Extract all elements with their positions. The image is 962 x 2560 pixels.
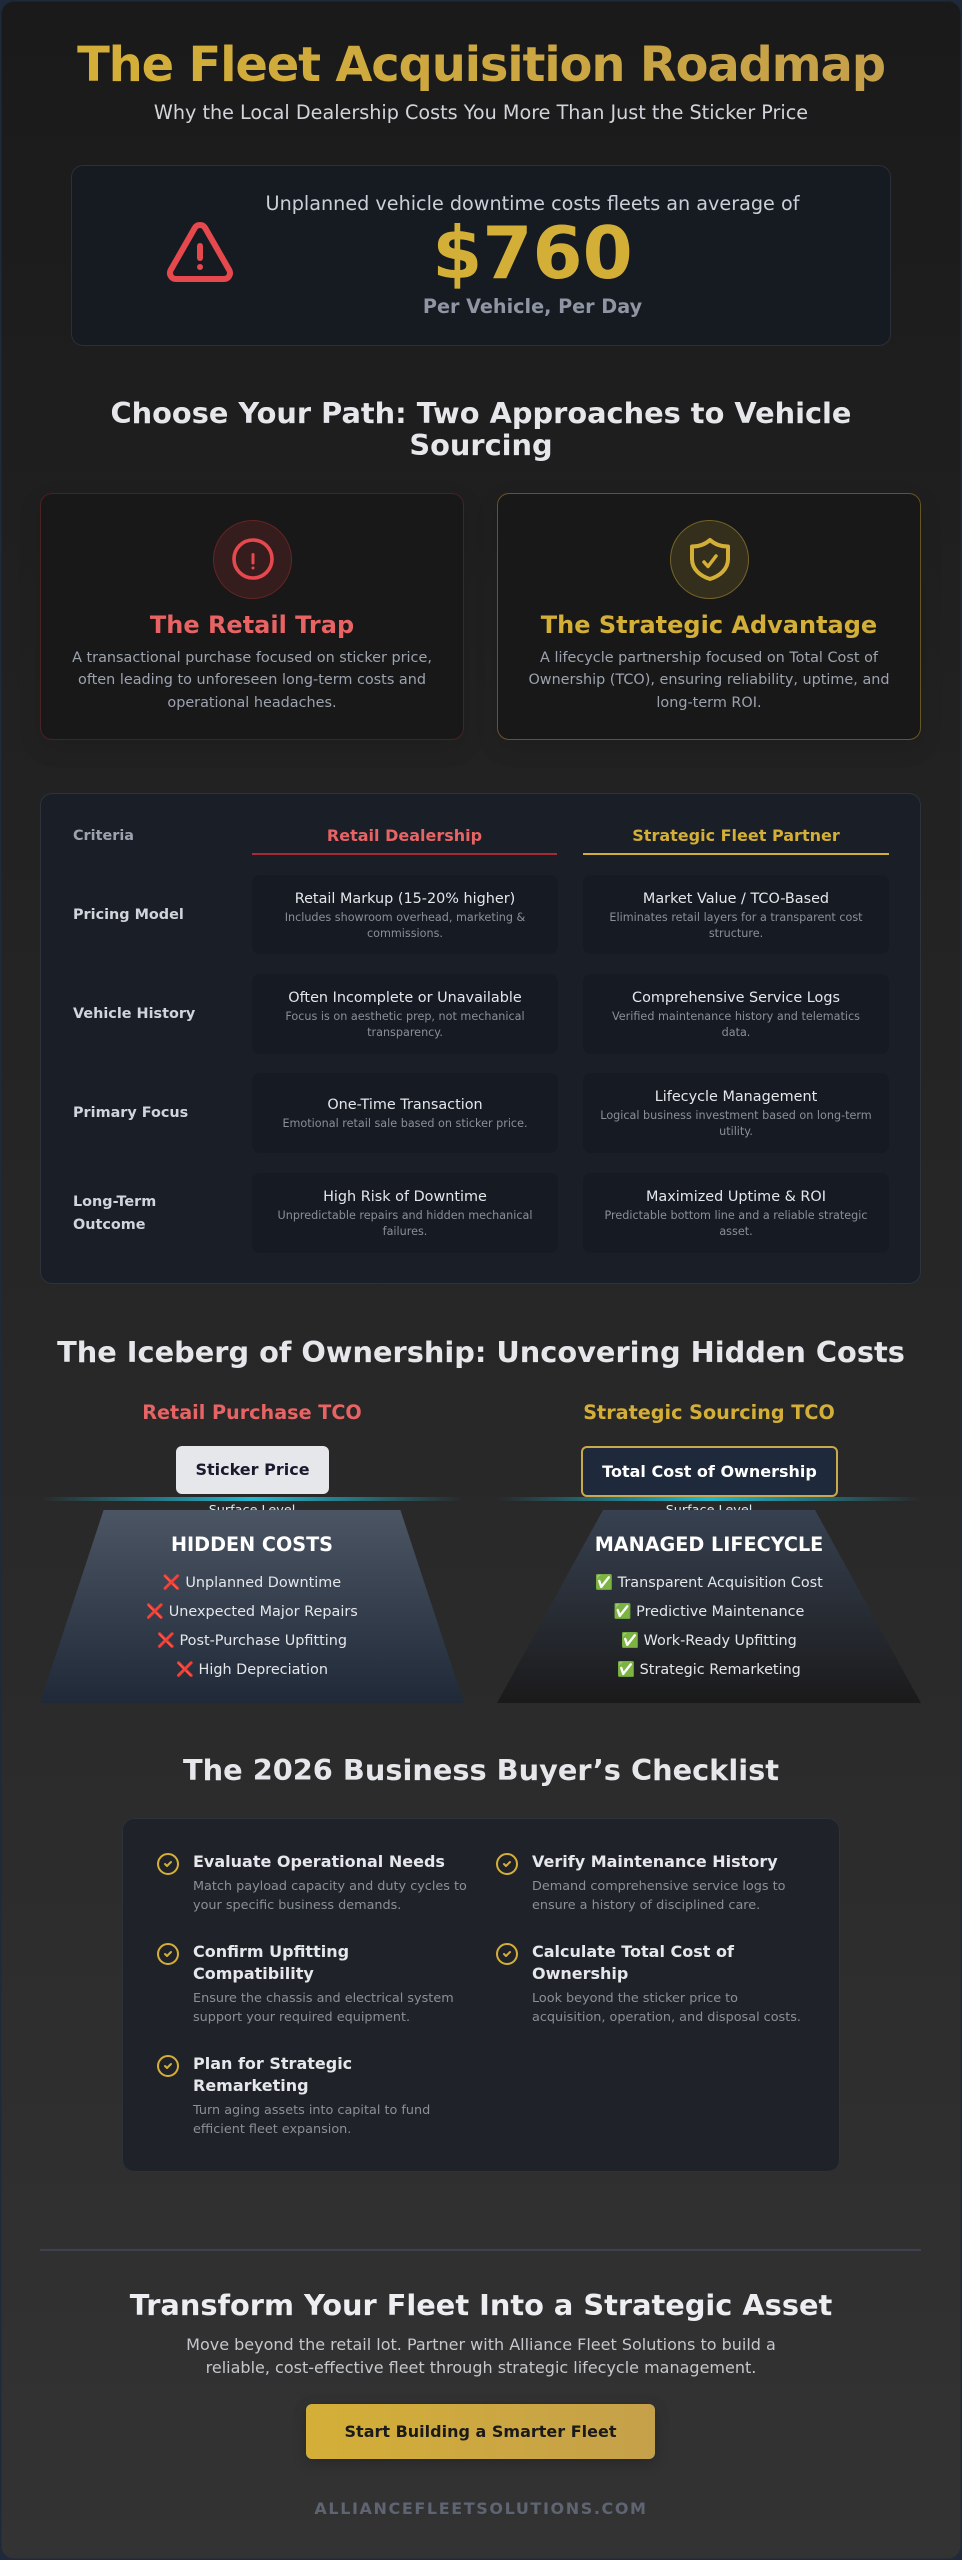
item description: Look beyond the sticker price to (532, 1991, 738, 2006)
cell: retail history (252, 974, 558, 1054)
item description (193, 1879, 467, 1913)
cell: strategic focus (583, 1073, 889, 1153)
cell: strategic outcome (583, 1173, 889, 1253)
submerged heading: HIDDEN COSTS (171, 1533, 333, 1556)
lifecycle items: ✅ Work-Ready Upfitting (621, 1633, 797, 1649)
card description: Ownership (TCO), ensuring reliability, uptime, and (528, 672, 890, 688)
lifecycle items (596, 1574, 822, 1677)
icon: check circle (496, 1853, 518, 1875)
hidden cost items: ❌ Post-Purchase Upfitting (157, 1633, 347, 1649)
above-water tip: total cost of ownership: Total Cost of Ownership (602, 1462, 817, 1481)
row label: long-term outcome (73, 1194, 156, 1233)
heading: choose your path: Sourcing (409, 428, 553, 462)
icon: shield check (670, 520, 749, 599)
column header: retail dealership (252, 825, 557, 855)
hidden cost items: ❌ High Depreciation (176, 1662, 328, 1678)
cell: retail history: Focus is on aesthetic prep, not mechanical transparency. (285, 1010, 525, 1039)
item title: Remarketing (193, 2076, 309, 2095)
button: start building: Start Building a Smarter Fleet (345, 2422, 616, 2441)
column label: criteria: Criteria (73, 828, 134, 844)
heading: call to action: Transform Your Fleet Into a Strategic Asset (130, 2288, 832, 2322)
icon: check circle (157, 1853, 179, 1875)
card description: operational headaches. (167, 695, 337, 711)
cell: retail pricing: Retail Markup (15-20% higher) (295, 890, 515, 906)
panel: downtime statistic alert (71, 165, 891, 346)
surface label: Surface Level (209, 1503, 295, 1518)
heading: business buyer checklist: The 2026 Business Buyer’s Checklist (183, 1753, 779, 1787)
column header: strategic fleet partner: Strategic Fleet Partner (632, 826, 840, 845)
row label: vehicle history: Vehicle History (73, 1006, 195, 1022)
hidden cost items: ❌ Unexpected Major Repairs (146, 1604, 358, 1620)
stat lead-in text: Unplanned vehicle downtime costs fleets an average of (266, 192, 799, 215)
stat value: $760 (432, 211, 633, 295)
footer url: ALLIANCEFLEETSOLUTIONS.COM (314, 2499, 648, 2518)
cell: strategic pricing (583, 875, 889, 954)
item description: Match payload capacity and duty cycles to (193, 1879, 467, 1894)
cell: strategic history: Comprehensive Service Logs (632, 990, 840, 1006)
cell: strategic focus: Lifecycle Management (655, 1089, 817, 1105)
item description: support your required equipment. (193, 2010, 410, 2025)
call to action text (186, 2335, 776, 2377)
above-water tip: sticker price (176, 1446, 329, 1494)
icon: check circle (157, 1943, 179, 1965)
lifecycle items: ✅ Strategic Remarketing (617, 1662, 801, 1678)
heading: choose your path (111, 396, 851, 462)
item description (193, 1991, 454, 2025)
item title (193, 2054, 352, 2095)
cell: strategic pricing: Eliminates retail layers for a transparent cost structure. (609, 910, 863, 940)
card description: A transactional purchase focused on sticker price, (72, 650, 432, 666)
title: The Fleet Acquisition Roadmap (77, 37, 885, 93)
column header: strategic fleet partner (583, 825, 889, 855)
cell: strategic focus: Logical business investment based on long-term utility. (600, 1109, 872, 1138)
row label: primary focus: Primary Focus (73, 1105, 188, 1121)
item title: Compatibility (193, 1964, 314, 1983)
row label: long-term outcome: Outcome (73, 1217, 146, 1233)
item title (193, 1942, 349, 1983)
icon: warning triangle (166, 222, 234, 282)
stat unit: Per Vehicle, Per Day (423, 295, 642, 318)
hidden cost items (147, 1574, 358, 1677)
panel: checklist (122, 1818, 840, 2172)
panel: comparison table (40, 793, 921, 1284)
button: start building (306, 2404, 655, 2459)
cell: retail outcome (252, 1173, 558, 1253)
cell: strategic outcome: Predictable bottom line and a reliable strategic asset. (604, 1209, 868, 1238)
checklist item: evaluate operational needs (157, 1852, 467, 1913)
card description: often leading to unforeseen long-term costs and (78, 672, 426, 688)
surface label: Surface Level (666, 1503, 752, 1518)
card heading: The Strategic Advantage (541, 611, 877, 639)
icon: check circle (157, 2055, 179, 2077)
cell: retail focus: Emotional retail sale based on sticker price. (282, 1117, 528, 1130)
cell: retail history: Often Incomplete or Unavailable (288, 990, 522, 1006)
heading: iceberg of ownership: The Iceberg of Ownership: Uncovering Hidden Costs (57, 1335, 905, 1369)
item title: Verify Maintenance History (532, 1852, 778, 1871)
hidden cost items: ❌ Unplanned Downtime (163, 1575, 341, 1591)
item title: Calculate Total Cost of (532, 1942, 734, 1961)
iceberg heading: Strategic Sourcing TCO (583, 1401, 835, 1424)
card heading: The Retail Trap (150, 611, 354, 639)
cell: retail outcome: High Risk of Downtime (323, 1189, 487, 1205)
card description (528, 650, 890, 711)
item description: Turn aging assets into capital to fund (193, 2103, 430, 2118)
iceberg heading: Retail Purchase TCO (142, 1401, 362, 1424)
panel: strategic iceberg (497, 1401, 921, 1703)
item title: Ownership (532, 1964, 628, 1983)
lifecycle items: ✅ Transparent Acquisition Cost (595, 1575, 823, 1591)
panel: the retail trap (40, 493, 464, 740)
cell: retail focus: One-Time Transaction (327, 1097, 483, 1113)
checklist item: verify maintenance history (496, 1852, 785, 1913)
checklist item: calculate total cost of ownership (496, 1942, 801, 2025)
lifecycle items: ✅ Predictive Maintenance (614, 1604, 804, 1620)
submerged iceberg: managed lifecycle (497, 1510, 921, 1703)
item description (192, 2103, 430, 2137)
cell: retail focus (252, 1073, 558, 1153)
card description (72, 650, 432, 711)
call to action text: Move beyond the retail lot. Partner with Alliance Fleet Solutions to build a (186, 2335, 776, 2354)
item description: ensure a history of disciplined care. (532, 1898, 760, 1913)
water line (40, 1497, 464, 1501)
panel: the strategic advantage (497, 493, 921, 740)
item description: your specific business demands. (193, 1898, 401, 1913)
item description: acquisition, operation, and disposal costs. (532, 2010, 801, 2025)
item description (532, 1879, 785, 1913)
cell: strategic pricing: Market Value / TCO-Based (643, 890, 829, 906)
water line (497, 1497, 921, 1501)
item description: efficient fleet expansion. (193, 2122, 351, 2137)
item title: Plan for Strategic (193, 2054, 352, 2073)
cell: retail outcome: Unpredictable repairs and hidden mechanical failures. (278, 1209, 532, 1238)
row label: long-term outcome: Long-Term (73, 1194, 156, 1210)
item title: Confirm Upfitting (193, 1942, 349, 1961)
item title (532, 1942, 734, 1983)
item description (532, 1991, 801, 2025)
checklist item: confirm upfitting compatibility (157, 1942, 454, 2025)
panel: retail iceberg (40, 1401, 464, 1703)
checklist item: plan for strategic remarketing (157, 2054, 430, 2137)
item description: Ensure the chassis and electrical system (193, 1991, 454, 2006)
cell: retail pricing: Includes showroom overhead, marketing & commissions. (285, 910, 525, 940)
heading: choose your path: Choose Your Path: Two Approaches to Vehicle (111, 396, 851, 430)
cell: strategic history (583, 974, 889, 1054)
call to action text: reliable, cost-effective fleet through strategic lifecycle management. (206, 2358, 756, 2377)
icon: check circle (496, 1943, 518, 1965)
submerged iceberg: hidden costs (40, 1510, 464, 1703)
icon: alert circle (213, 520, 292, 599)
item description: Demand comprehensive service logs to (532, 1879, 785, 1894)
submerged heading: MANAGED LIFECYCLE (595, 1533, 823, 1556)
cell: strategic history: Verified maintenance history and telematics data. (612, 1010, 860, 1039)
cell: strategic outcome: Maximized Uptime & ROI (646, 1189, 826, 1205)
subtitle: Why the Local Dealership Costs You More Than Just the Sticker Price (154, 101, 808, 124)
above-water tip: sticker price: Sticker Price (195, 1460, 310, 1479)
row label: pricing model: Pricing Model (73, 907, 184, 923)
card description: long-term ROI. (656, 695, 762, 711)
cell: retail pricing (252, 875, 558, 954)
column header: retail dealership: Retail Dealership (327, 826, 482, 845)
above-water tip: total cost of ownership (581, 1446, 838, 1497)
item title: Evaluate Operational Needs (193, 1852, 445, 1871)
card description: A lifecycle partnership focused on Total Cost of (540, 650, 878, 666)
